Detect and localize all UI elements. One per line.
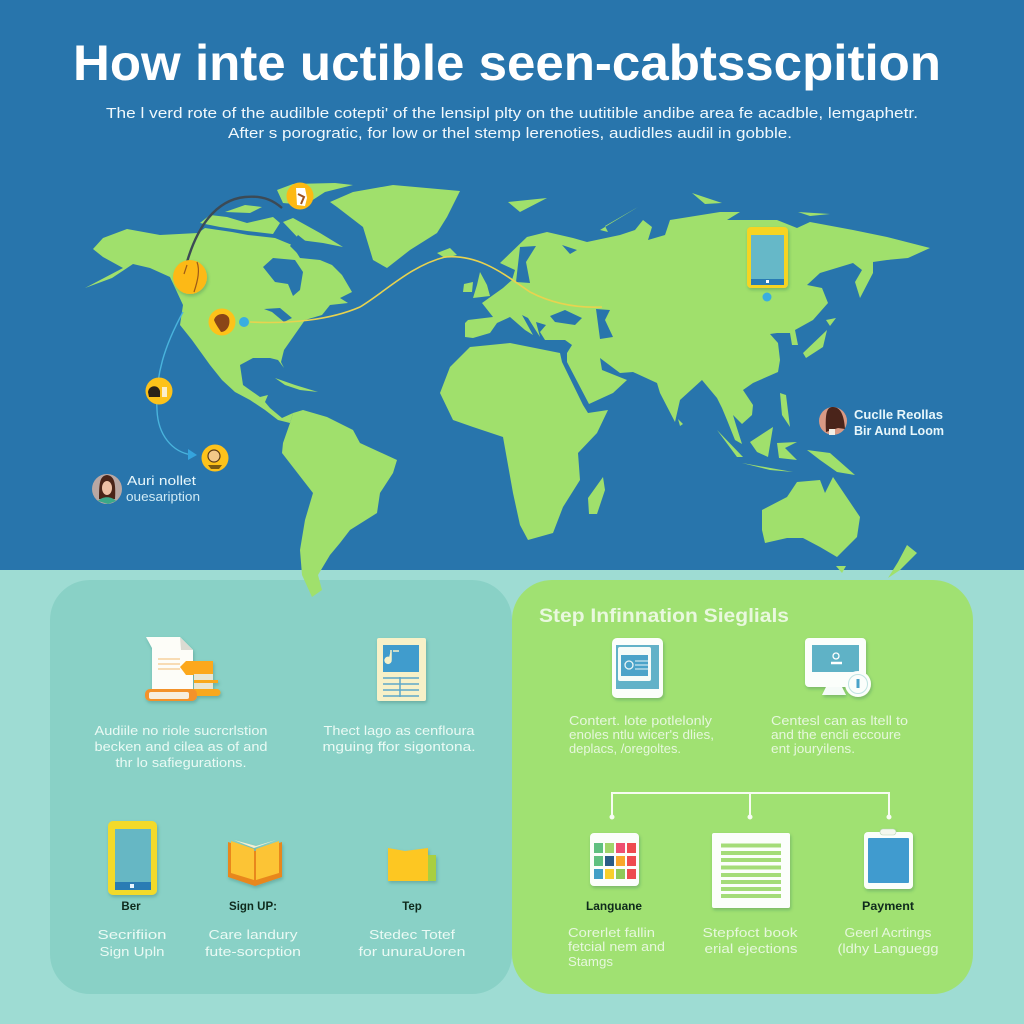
Africa [440,343,608,540]
text: Languane description: Corerlet fallin [568,926,655,940]
callout: right avatar label: Bir Aund Loom [854,424,944,438]
icon: yellow folder [388,848,436,881]
text: Languane description: fetcial nem and [568,940,665,954]
title: How inte uctible seen-cabtsscpition [73,35,941,91]
text: left panel block two [322,723,476,754]
marker: avatar USA [208,308,249,336]
background: lower band [0,570,1024,1024]
label: Languane: Languane [586,901,642,913]
label: Sign UP: Sign UP: [229,901,277,913]
text: Languane description [568,926,665,969]
Asia Pacific islands [508,193,855,514]
route: blue arrow [157,312,197,460]
text: left panel block one: becken and cilea as of and [94,739,268,754]
callout: left avatar label [92,474,200,504]
marker: avatar Pacific [146,378,172,404]
icon: monitor with badge [805,638,871,697]
panel: right green steps [512,580,973,994]
text: right panel block two: and the encli eccoure [771,728,901,742]
text: left panel block one: Audiile no riole sucrcrlstion [94,723,268,738]
text: left panel block two: Thect lago as cenfloura [324,723,475,738]
marker: headphone pin [173,197,282,294]
Australia and New Zealand [762,477,917,578]
text: right panel block two: Centesl can as ltell to [771,714,908,728]
text: right panel block two [771,714,908,756]
icon: language grid [590,833,639,886]
text: Sign UP description: Care landury [208,927,298,942]
callout: left avatar label: Auri nollet [127,474,197,488]
marker: avatar south [202,444,228,472]
background: ocean band [0,0,1024,570]
text: right panel block one: enoles ntlu wicer's dlies, [569,728,714,742]
text: Tep description: Stedec Totef [369,927,455,942]
world map [85,183,930,597]
Eurasia [465,212,930,444]
marker: avatar north [286,182,314,210]
text: Tep description [358,927,466,959]
text: right panel block one: deplacs, /oregoltes. [569,742,681,756]
text: Sign UP description: fute-sorcption [205,944,301,959]
text: Payment description [838,926,939,956]
text: left panel block one [94,723,268,770]
text: right panel block one: Contert. lote potlelonly [569,714,713,728]
label: Tep: Tep [402,901,422,913]
heading: right panel: Step Infinnation Sieglials [539,606,789,627]
icon: phone on map [747,227,788,302]
text: Ber description [98,927,166,959]
icon: tablet [612,638,663,698]
icon: open book [228,840,282,886]
icon: clipboard [864,829,913,889]
label: Payment: Payment [862,901,914,913]
text: Sign UP description [205,927,301,959]
Greenland [330,185,460,268]
text: Payment description: Geerl Acrtings [844,926,932,940]
subtitle [106,105,918,142]
text: Languane description: Stamgs [568,955,613,969]
icon: yellow tablet [108,821,157,895]
text: right panel block one [569,714,714,756]
subtitle: The l verd rote of the audilble cotepti' of the lensipl plty on the uutitible andibe area fe acadble, lemgaphetr. [106,105,918,122]
icon: document and books [145,637,220,701]
label: Ber: Ber [121,901,141,913]
subtitle: After s porogratic, for low or thel stemp lerenoties, audidles audil in gobble. [228,125,792,142]
text: Tep description: for unuraUoren [358,944,466,959]
route: yellow flight path [250,257,602,322]
Iceland and UK [437,248,490,298]
connector: tree [610,793,890,818]
Caribbean islands [275,378,318,392]
callout: right avatar label: Cuclle Reollas [854,408,943,422]
text: Payment description: (ldhy Languegg [838,942,939,956]
Arctic islands [200,183,353,247]
icon: audio card [377,638,426,701]
panel: left teal steps [50,580,512,994]
icon: text document [712,833,790,908]
seas and lakes [198,235,613,373]
callout: left avatar label: ouesaription [126,490,200,504]
callout: right avatar label [819,407,944,438]
South America [282,410,397,597]
text: Ber description: Secrifiion [98,927,166,942]
text: left panel block two: mguing ffor sigontona. [322,739,476,754]
text: right panel block two: ent jouryilens. [771,742,855,756]
text: document description: erial ejections [704,942,798,956]
North America [85,228,352,423]
text: Ber description: Sign Upln [100,944,164,959]
text: left panel block one: thr lo safiegurations. [116,755,246,770]
text: document description [702,926,798,956]
text: document description: Stepfoct book [702,926,798,940]
